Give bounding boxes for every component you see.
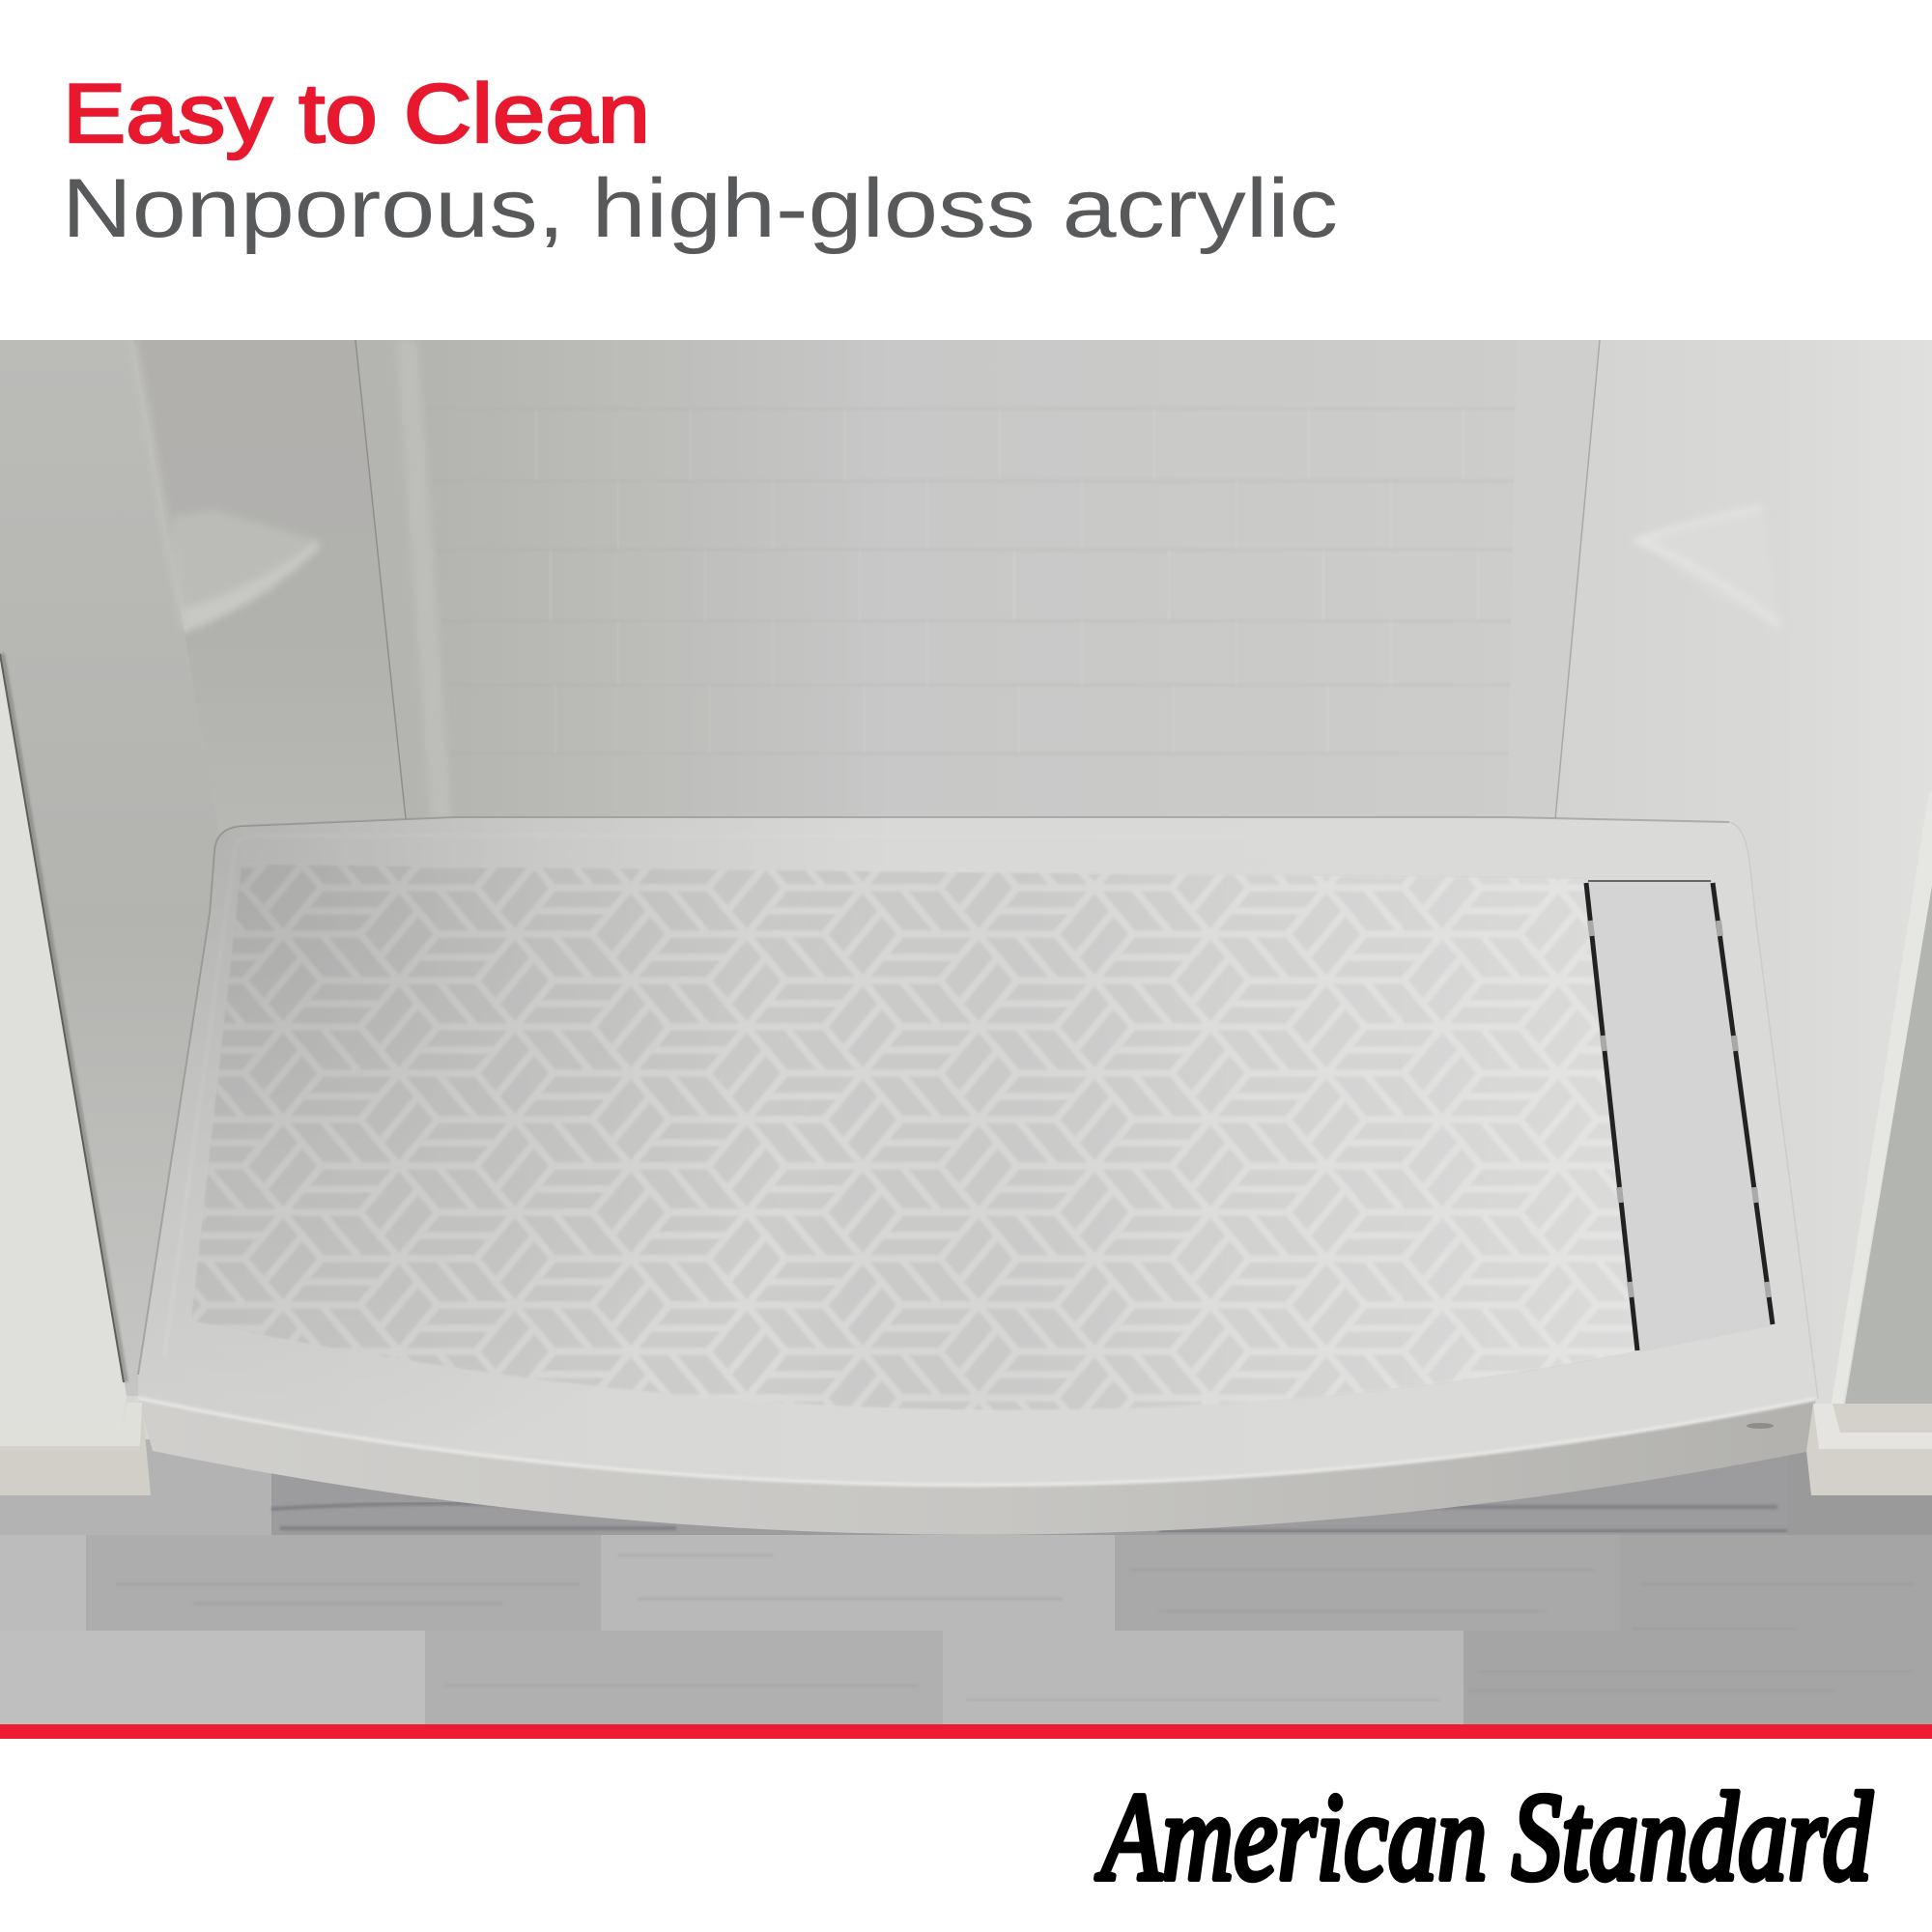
right side wall	[1889, 340, 1932, 1134]
title: Easy to Clean: Easy to Clean	[63, 68, 650, 160]
left side wall	[133, 340, 348, 836]
left door jamb panel	[0, 340, 220, 1396]
floor pattern area	[191, 865, 1638, 1410]
linear drain	[1586, 881, 1773, 1352]
floor	[0, 1439, 1932, 1724]
left foreground panel	[0, 654, 127, 1430]
subtitle: Nonporous, high-gloss acrylic: Nonporous, high-gloss acrylic	[62, 162, 1338, 255]
right slot	[1713, 883, 1773, 1324]
pan rim	[138, 817, 1818, 1485]
right corner shelf	[1638, 516, 1754, 606]
right corner post	[1555, 340, 1601, 818]
left corner post	[355, 340, 456, 821]
plank row 2	[0, 1535, 1932, 1631]
water outlet mark	[1747, 1423, 1774, 1429]
rim edge outline	[138, 817, 1729, 1375]
rim inset ridge	[164, 836, 1700, 1357]
plank row 3	[0, 1631, 1932, 1724]
left side shading	[153, 817, 678, 1293]
wall base layer	[122, 1396, 150, 1439]
back wall with subway tile	[421, 340, 1517, 817]
left slot	[1586, 883, 1637, 1350]
shower photo scene	[0, 340, 1932, 1724]
drain cover	[1587, 881, 1771, 1352]
right door panel	[1832, 887, 1932, 1404]
shower pan	[138, 817, 1818, 1535]
plank row 1	[270, 1452, 1932, 1535]
left corner shelf	[170, 510, 321, 634]
left baseboard	[0, 1403, 151, 1495]
pan front face	[138, 1398, 1816, 1535]
right baseboard	[1806, 1404, 1932, 1495]
red divider bar	[0, 1724, 1932, 1739]
rim highlight	[138, 1398, 1816, 1485]
heading	[62, 68, 1338, 255]
